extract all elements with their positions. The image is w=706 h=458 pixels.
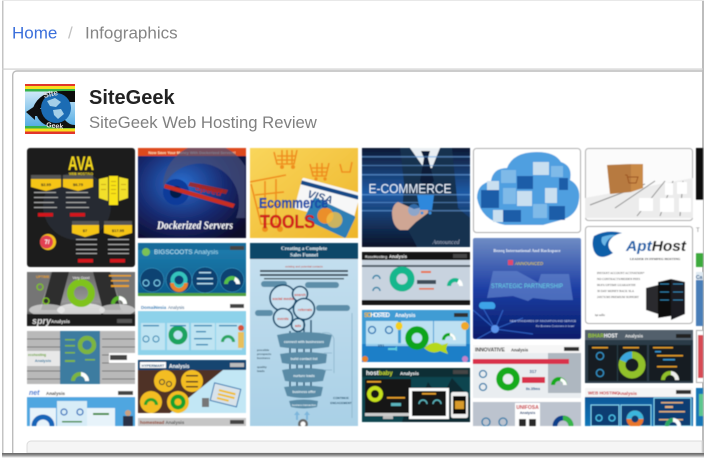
thumbnail: Hypermart Analysis: HYPERMART (142, 364, 165, 368)
thumbnail: DomainNesia Analysis: DomaiNesia (141, 305, 167, 310)
thumbnail: right edge column 1: T (696, 228, 700, 234)
thumbnail: Dockerized Servers: Speed (194, 182, 224, 198)
thumbnail: Creating a Complete Sales Funnel: nurture leads (293, 374, 315, 378)
thumbnail: Creating a Complete Sales Funnel: business transaction (292, 404, 316, 407)
thumbnail: Innovative Analysis (472, 346, 582, 398)
thumbnail: right edge column 3 (696, 330, 704, 384)
thumbnail: Creating a Complete Sales Funnel (249, 242, 359, 427)
thumbnail: Web hosting analysis (black header) (361, 251, 471, 306)
thumbnail: Bezeq and Rackspace partnership: NEW STANDARDS OF INNOVATION AND SERVICE (510, 319, 576, 323)
thumbnail: Ecommerce Tools: VISA (306, 189, 334, 207)
thumbnail: Ecommerce Tools: TOOLS (260, 212, 315, 232)
thumbnail: AptHost (584, 226, 694, 324)
thumbnail: Bezeq and Rackspace partnership (472, 237, 582, 340)
thumbnail: Unifosa Analysis (cropped): UNIFOSA (516, 405, 539, 411)
thumbnail: Hostbaby Analysis (361, 367, 471, 423)
thumbnail: Hostbaby Analysis: hostbaby (366, 371, 393, 377)
thumbnail: Bezeq and Rackspace partnership: Bezeq International And Rackspace (493, 248, 561, 253)
thumbnail: Ecommerce Tools (249, 147, 359, 239)
thumbnail: right edge column 1 (695, 147, 704, 268)
thumbnail: right edge column 2: Ca (696, 275, 703, 281)
thumbnail: Creating a Complete Sales Funnel: ENGAGEMENT (330, 401, 352, 405)
thumbnail: Hypermart Analysis: Analysis (169, 364, 190, 370)
thumbnail: Bihar Host Analysis: Analysis (625, 334, 644, 338)
thumbnail: BigScoots Analysis: BIGSCOOTS Analysis (154, 249, 219, 256)
thumbnail: Creating a Complete Sales Funnel: ads (295, 324, 301, 328)
thumbnail: Creating a Complete Sales Funnel: possible (257, 348, 270, 352)
thumbnail: Creating a Complete Sales Funnel: Creating a Complete (281, 246, 328, 252)
thumbnail: E-Commerce (361, 147, 471, 248)
thumbnail: AptHost: LEADER IN FFMPEG HOSTING (630, 257, 681, 261)
thumbnail: Net4 Analysis (cropped): net (29, 390, 40, 397)
thumbnail: Web Hosting Analysis (cropped): WEB HOSTING (588, 390, 620, 396)
thumbnail: Innovative Analysis: 8s.35ms (526, 387, 540, 391)
thumbnail: cloud puzzle (472, 148, 582, 234)
thumbnail: AVA Web Hosting: WEB HOSTING (69, 172, 94, 176)
thumbnail: E-Commerce: E-COMMERCE (368, 182, 452, 196)
thumbnail: Homestead Analysis (cropped): homestead Analysis (140, 420, 185, 425)
thumbnail: Spry Analysis: UPTIME (36, 275, 50, 279)
icon: SiteGeek logo: Geek (46, 122, 64, 131)
thumbnail: Bezeq and Rackspace partnership: STRATEGIC PARTNERSHIP (491, 284, 563, 290)
thumbnail: Creating a Complete Sales Funnel: social media (272, 297, 295, 301)
thumbnail: AVA Web Hosting: 7/ (44, 240, 50, 246)
thumbnail: AVA Web Hosting: $6.75 (73, 182, 84, 187)
thumbnail: ecohosting analysis: Analysis (35, 358, 52, 363)
thumbnail: Innovative Analysis: INNOVATIVE (475, 348, 505, 354)
thumbnail: Web hosting analysis (black header): Analysis (389, 254, 408, 259)
thumbnail: Creating a Complete Sales Funnel: search (294, 293, 306, 297)
thumbnail: right edge column 4 (695, 387, 704, 427)
thumbnail: SoHosted Analysis: 351 (378, 343, 385, 348)
thumbnail: Bihar Host Analysis (584, 329, 694, 384)
thumbnail: ecohosting analysis (26, 330, 136, 385)
thumbnail: AVA Web Hosting: $17.95 (112, 228, 125, 233)
thumbnail: Creating a Complete Sales Funnel: CONTINUE (333, 396, 349, 400)
thumbnail: BigScoots Analysis (137, 242, 247, 297)
thumbnail: AVA Web Hosting: $2.95 (41, 182, 52, 187)
thumbnail: Creating a Complete Sales Funnel: events (277, 317, 289, 321)
subheading: SiteGeek Web Hosting Review (89, 113, 318, 132)
thumbnail: Creating a Complete Sales Funnel: business (257, 356, 270, 360)
thumbnail: Creating a Complete Sales Funnel: referrals (298, 308, 312, 312)
thumbnail: Net4 Analysis (cropped): Analysis (46, 391, 65, 396)
thumbnail: Creating a Complete Sales Funnel: existing and potential contacts (285, 264, 323, 268)
thumbnail: Bihar Host Analysis: BIHARHOST (588, 334, 618, 340)
thumbnail: SoHosted Analysis (361, 309, 471, 363)
thumbnail: DomainNesia Analysis: Analysis (168, 305, 185, 310)
breadcrumb: Infographics (85, 24, 178, 42)
thumbnail: Spry Analysis: Very Good (73, 276, 89, 280)
icon: server stacks (646, 279, 685, 320)
thumbnail: ecohosting analysis: ecohosting (28, 353, 46, 357)
thumbnail: Net4 Analysis (cropped) (26, 390, 136, 427)
icon: SiteGeek logo (25, 84, 75, 134)
thumbnail: Unifosa Analysis (cropped) (472, 402, 582, 427)
thumbnail: Web Hosting Analysis (cropped) (584, 388, 694, 427)
thumbnail: Spry Analysis: Analysis (51, 319, 70, 324)
thumbnail: Homestead Analysis (cropped) (138, 418, 246, 426)
thumbnail: Creating a Complete Sales Funnel: prospects (257, 352, 272, 356)
thumbnail: AptHost: 24X7X365 PREMIUM SUPPORT (597, 295, 639, 299)
thumbnail: AptHost: NO CONTRACTS/HIDDEN FEES (597, 277, 640, 281)
panel: bottom comment box (27, 441, 702, 453)
thumbnail: Unifosa Analysis (cropped): Analysis (520, 411, 535, 415)
thumbnail: Dockerized Servers: Now Save Your Money With Dockerized Servers! (148, 151, 236, 155)
thumbnail: E-Commerce: Announced (432, 240, 460, 246)
thumbnail: Creating a Complete Sales Funnel: build contact list (291, 357, 318, 361)
thumbnail: cart on keyboard (584, 148, 694, 222)
thumbnail: AptHost: AptHost (625, 238, 687, 255)
thumbnail: Web hosting analysis (black header): RoseHosting (365, 255, 387, 259)
thumbnail: AptHost: 30 DAY MONEY BACK SLA (597, 289, 635, 293)
thumbnail: Dockerized Servers (137, 147, 247, 239)
thumbnail: Spry Analysis (26, 271, 136, 327)
thumbnail: SoHosted Analysis: SOHOSTED (364, 313, 391, 319)
thumbnail: DomainNesia Analysis (137, 303, 247, 356)
thumbnail: Bezeq and Rackspace partnership: ANNOUNCED (514, 261, 544, 266)
icon: yellow servers (99, 176, 128, 205)
thumbnail: right edge column 2 (695, 272, 704, 327)
thumbnail: Ecommerce Tools: Ecommerce (259, 196, 328, 212)
thumbnail: Creating a Complete Sales Funnel: business offer (292, 390, 316, 394)
thumbnail: Creating a Complete Sales Funnel: leads (257, 369, 265, 373)
window bottom shadow (2, 453, 704, 458)
thumbnail: Spry Analysis: spry (32, 316, 52, 326)
breadcrumb: Home (12, 24, 57, 42)
thumbnail: Creating a Complete Sales Funnel: connect with businesses (284, 340, 324, 344)
thumbnail: AVA Web Hosting (26, 147, 136, 268)
thumbnail: Web Hosting Analysis (cropped): Analysis (618, 391, 637, 396)
breadcrumb (12, 24, 178, 42)
thumbnail: Creating a Complete Sales Funnel: Sales Funnel (290, 252, 319, 258)
thumbnail: Hypermart Analysis (137, 359, 247, 414)
gallery of infographic thumbnails (27, 144, 704, 435)
thumbnail: AVA Web Hosting: $7 (83, 228, 88, 233)
thumbnail: Bezeq and Rackspace partnership: For Business Customers In Israel (536, 324, 575, 328)
thumbnail: AVA Web Hosting: AVA (68, 154, 94, 175)
icon: SiteGeek logo: Site (43, 88, 59, 100)
thumbnail: AptHost: 99.9% UPTIME GUARANTEE (597, 283, 636, 287)
thumbnail: Creating a Complete Sales Funnel: quality (257, 365, 267, 369)
thumbnail: Innovative Analysis: 317 (530, 369, 537, 374)
thumbnail: AptHost: hpt suffix (595, 314, 606, 317)
thumbnail: SoHosted Analysis: Analysis (395, 313, 416, 319)
thumbnail: Innovative Analysis: Analysis (511, 348, 529, 352)
thumbnail: Hostbaby Analysis: Analysis (400, 371, 419, 376)
breadcrumb: / (68, 24, 73, 42)
heading: SiteGeek (89, 87, 175, 109)
thumbnail: AptHost: INSTANT ACCOUNT ACTIVATION* (597, 271, 645, 275)
